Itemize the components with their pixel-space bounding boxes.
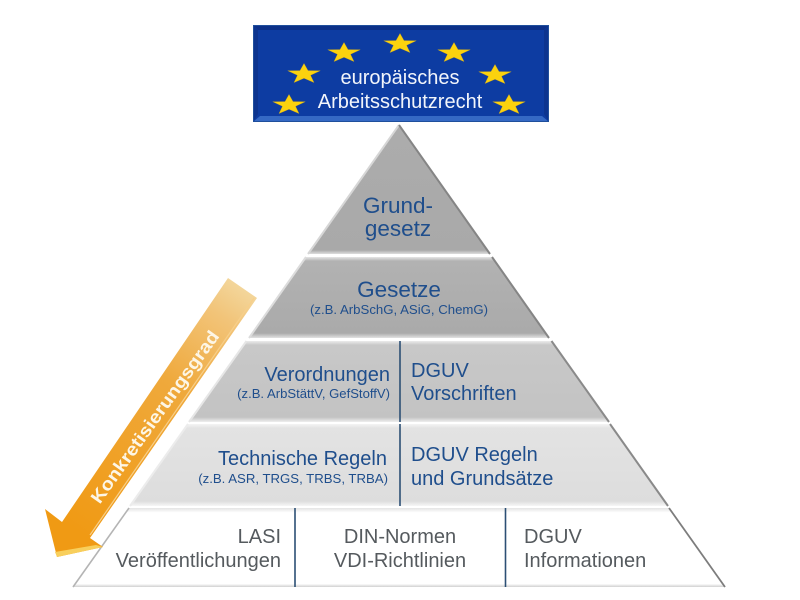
tier: Verordnungen und DGUV Vorschriften: DGUV: [411, 360, 469, 382]
tier: LASI, DIN-Normen, DGUV Informationen: VDI-Richtlinien: [334, 550, 466, 572]
tier: Verordnungen und DGUV Vorschriften: [189, 341, 609, 422]
tier: Gesetze: (z.B. ArbSchG, ASiG, ChemG): [310, 302, 488, 317]
flag panel: europäisches Arbeitsschutzrecht: [253, 25, 549, 122]
tier: Grundgesetz: Grund-: [363, 193, 433, 218]
tier: Technische Regeln und DGUV Regeln: Technische Regeln: [218, 448, 387, 470]
flag text: Arbeitsschutzrecht: [318, 91, 483, 113]
tier: Technische Regeln und DGUV Regeln: [130, 424, 668, 506]
tier: LASI, DIN-Normen, DGUV Informationen: Veröffentlichungen: [116, 550, 281, 572]
tier: LASI, DIN-Normen, DGUV Informationen: LASI: [238, 526, 281, 548]
pyramid: [73, 125, 725, 587]
tier: Technische Regeln und DGUV Regeln: (z.B. ASR, TRGS, TRBS, TRBA): [198, 471, 388, 486]
flag text: europäisches: [341, 67, 459, 89]
tier: Grundgesetz: [308, 125, 490, 254]
tier: Verordnungen und DGUV Vorschriften: Verordnungen: [264, 364, 390, 386]
tier: Verordnungen und DGUV Vorschriften: Vorschriften: [411, 383, 517, 405]
tier: Verordnungen und DGUV Vorschriften: (z.B. ArbStättV, GefStoffV): [237, 386, 390, 401]
tier: LASI, DIN-Normen, DGUV Informationen: DGUV: [524, 526, 582, 548]
tier: LASI, DIN-Normen, DGUV Informationen: DIN-Normen: [344, 526, 456, 548]
tier: LASI, DIN-Normen, DGUV Informationen: Informationen: [524, 550, 646, 572]
tier: Gesetze: Gesetze: [357, 277, 441, 302]
tier: Grundgesetz: gesetz: [365, 216, 431, 241]
tier: Technische Regeln und DGUV Regeln: DGUV Regeln: [411, 444, 538, 466]
arrow: Konkretisierungsgrad: [45, 278, 257, 557]
tier: Technische Regeln und DGUV Regeln: und Grundsätze: [411, 468, 553, 490]
arrow label: Konkretisierungsgrad: [87, 327, 223, 507]
flag text: [318, 67, 483, 113]
tier: LASI, DIN-Normen, DGUV Informationen: [73, 508, 725, 587]
tier: Gesetze: [249, 257, 549, 338]
icon: ring of yellow stars: [273, 33, 525, 114]
